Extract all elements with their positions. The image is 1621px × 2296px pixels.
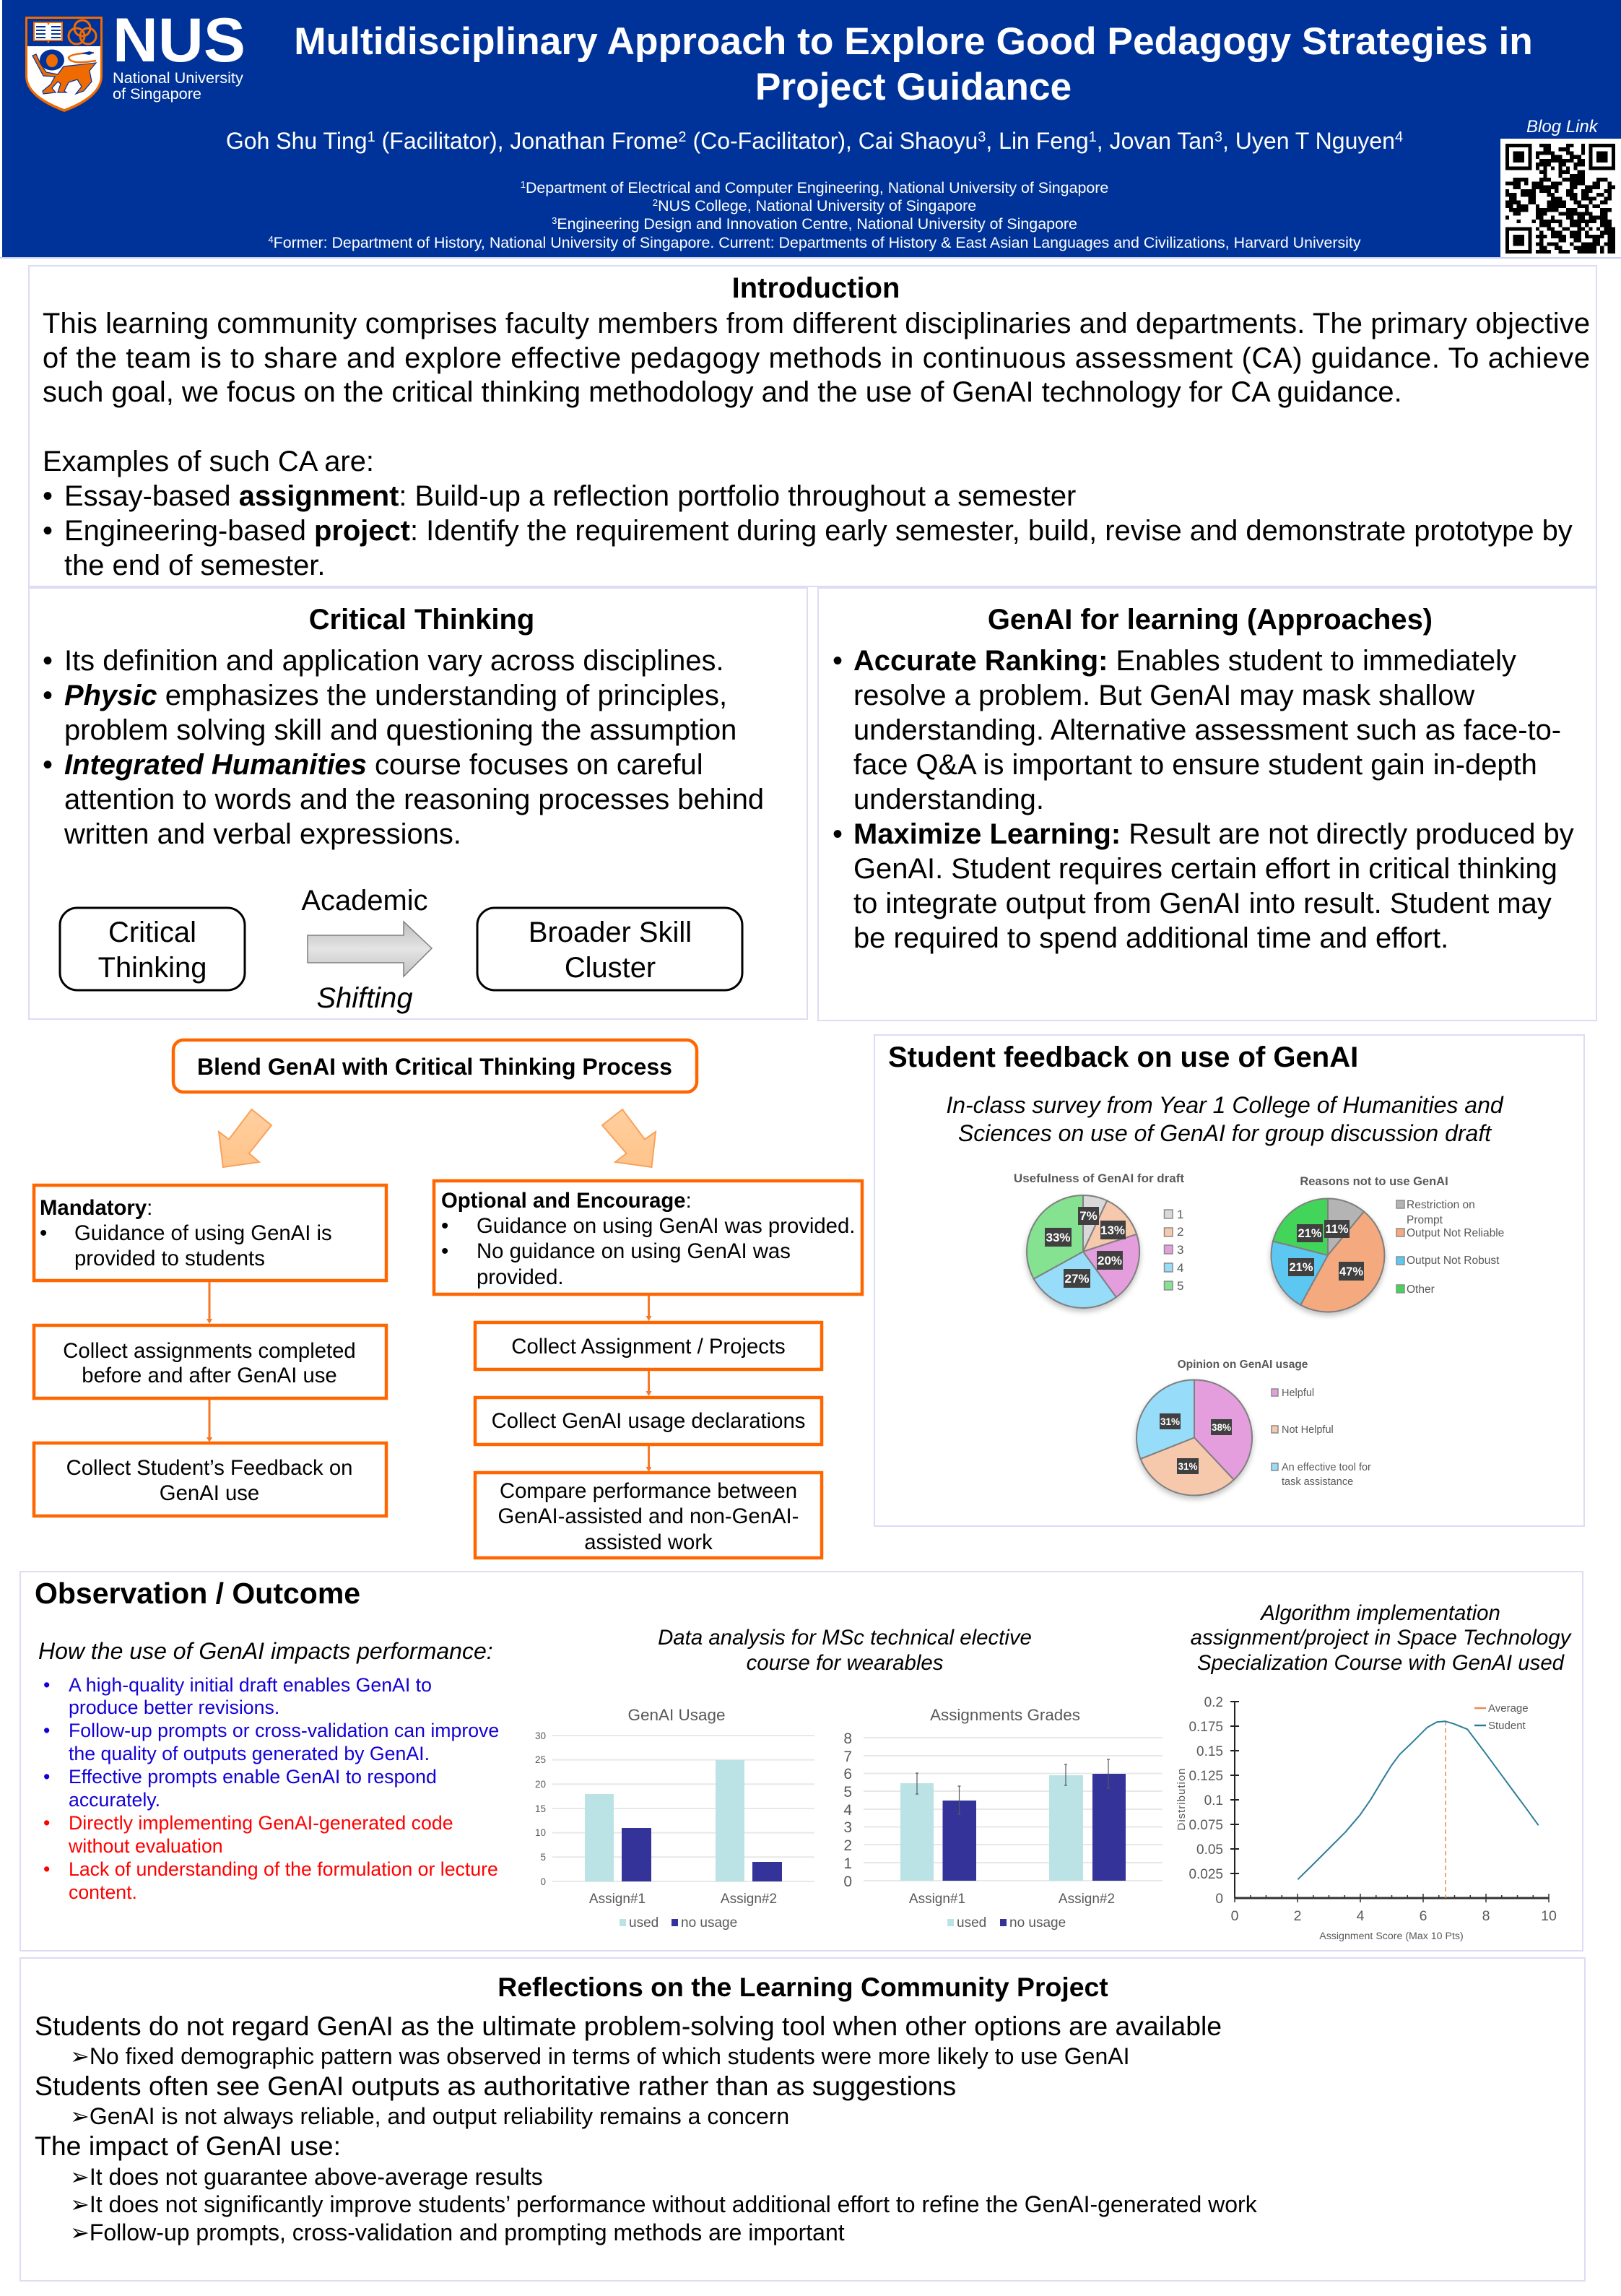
pie chart: usefulness: 20% bbox=[1098, 1254, 1122, 1268]
impacts list: A high-quality initial draft enables GenAI to bbox=[69, 1674, 432, 1696]
panel: critical thinking bbox=[29, 588, 807, 1019]
impacts list: the quality of outputs generated by GenAI. bbox=[69, 1743, 430, 1764]
QR code bbox=[1500, 139, 1621, 257]
approaches bullets: Accurate Ranking: Enables student to immediately bbox=[853, 645, 1516, 677]
logo: NUS shield and wordmark: of Singapore bbox=[113, 85, 201, 103]
pie chart: reasons not to use: Restriction on bbox=[1407, 1199, 1475, 1211]
critical thinking bullets: attention to words and the reasoning processes behind bbox=[64, 784, 764, 815]
algorithm heading: Specialization Course with GenAI used bbox=[1197, 1651, 1565, 1675]
box: collect assignment projects: Collect Assignment / Projects bbox=[511, 1335, 786, 1359]
survey subtitle bbox=[946, 1092, 1504, 1146]
pie chart: opinion: 31% bbox=[1160, 1416, 1180, 1427]
examples list: Examples of such CA are: bbox=[43, 446, 374, 477]
box: mandatory: provided to students bbox=[74, 1247, 265, 1270]
impacts list bbox=[43, 1674, 499, 1903]
box: mandatory: Mandatory: bbox=[40, 1196, 152, 1220]
affiliations: 4 bbox=[268, 234, 274, 245]
data analysis heading: Data analysis for MSc technical elective bbox=[658, 1626, 1032, 1650]
approaches bullets: • bbox=[833, 818, 843, 850]
affiliations: 3 bbox=[552, 215, 557, 226]
authors: 2 bbox=[678, 129, 687, 145]
pie chart: opinion: task assistance bbox=[1282, 1476, 1353, 1488]
line chart: score distribution: Student bbox=[1488, 1720, 1526, 1732]
bar chart: assignments grades: 8 bbox=[843, 1730, 852, 1747]
reflections list: ➢No fixed demographic pattern was observed in terms of which students were more likely to use GenAI bbox=[70, 2042, 1129, 2070]
line chart: score distribution: 10 bbox=[1541, 1908, 1557, 1924]
line chart: score distribution: Assignment Score (Max 10 Pts) bbox=[1319, 1931, 1464, 1942]
panel: reflections bbox=[20, 1958, 1585, 2281]
authors: (Facilitator), Jonathan Frome bbox=[375, 128, 678, 154]
authors: 1 bbox=[368, 129, 375, 145]
algorithm heading bbox=[1191, 1601, 1573, 1675]
pie chart: usefulness bbox=[1014, 1171, 1184, 1308]
affiliations: 2 bbox=[653, 197, 658, 208]
bar chart: GenAI usage: 30 bbox=[535, 1730, 546, 1741]
critical thinking bullets: Integrated Humanities course focuses on careful bbox=[64, 749, 703, 781]
impacts list: • bbox=[43, 1766, 50, 1788]
bar chart: assignments grades: used bbox=[957, 1915, 986, 1931]
line chart: score distribution: 4 bbox=[1357, 1908, 1365, 1924]
bar chart: GenAI usage: no usage bbox=[681, 1915, 737, 1931]
approaches bullets: • bbox=[833, 645, 843, 677]
reflections list: ➢It does not guarantee above-average results bbox=[70, 2163, 543, 2191]
line chart: score distribution: 6 bbox=[1420, 1908, 1427, 1924]
box: collect feedback: GenAI use bbox=[160, 1481, 259, 1505]
survey subtitle: In-class survey from Year 1 College of Humanities and bbox=[946, 1092, 1504, 1118]
logo: NUS shield and wordmark: National University bbox=[113, 69, 243, 87]
bar chart: assignments grades: 0 bbox=[843, 1873, 852, 1890]
impacts list: Follow-up prompts or cross-validation can improve bbox=[69, 1720, 499, 1741]
line chart: score distribution: 0.125 bbox=[1188, 1769, 1223, 1784]
reflections list: ➢It does not significantly improve students’ performance without additional effort to refine the GenAI-generated work bbox=[70, 2191, 1258, 2218]
reflections list: The impact of GenAI use: bbox=[35, 2131, 341, 2161]
box: critical thinking: Thinking bbox=[98, 952, 207, 984]
bar chart: assignments grades bbox=[843, 1706, 1162, 1931]
critical thinking bullets: • bbox=[43, 749, 53, 781]
bar chart: assignments grades: 4 bbox=[843, 1802, 852, 1819]
arrow: to mandatory bbox=[219, 1109, 271, 1167]
affiliations: Engineering Design and Innovation Centre, National University of Singapore bbox=[557, 215, 1077, 233]
panel: student feedback bbox=[874, 1035, 1584, 1526]
bar chart: GenAI usage: 5 bbox=[540, 1852, 546, 1863]
approaches bullets: be required to spend additional time and effort. bbox=[853, 922, 1448, 954]
approaches bullets: to integrate output from GenAI into result. Student may bbox=[853, 888, 1552, 919]
authors: (Co-Facilitator), Cai Shaoyu bbox=[687, 128, 978, 154]
authors: , Lin Feng bbox=[986, 128, 1089, 154]
pie chart: opinion: An effective tool for bbox=[1282, 1462, 1371, 1473]
reflections list: Students often see GenAI outputs as authoritative rather than as suggestions bbox=[35, 2071, 956, 2101]
box: compare performance: GenAI-assisted and non-GenAI- bbox=[498, 1504, 799, 1528]
line chart: score distribution: 2 bbox=[1294, 1908, 1301, 1924]
approaches bullets: GenAI. Student requires certain effort in critical thinking bbox=[853, 853, 1557, 885]
pie chart: usefulness: 4 bbox=[1177, 1261, 1183, 1275]
impacts list: Effective prompts enable GenAI to respond bbox=[69, 1766, 437, 1788]
flow title box bbox=[173, 1040, 697, 1092]
bar chart: GenAI usage: 10 bbox=[535, 1827, 546, 1838]
pie chart: usefulness: 5 bbox=[1177, 1279, 1183, 1293]
pie chart: reasons not to use: Output Not Robust bbox=[1407, 1255, 1500, 1267]
affiliations: Former: Department of History, National University of Singapore. Current: Departments of History & East Asian Languages and Civilizations, Harvard University bbox=[274, 234, 1361, 251]
box: collect assignments: Collect assignments completed bbox=[63, 1339, 356, 1363]
bar chart: assignments grades: 5 bbox=[843, 1784, 852, 1801]
line chart: score distribution: 0.15 bbox=[1196, 1744, 1223, 1759]
bar chart: assignments grades: Assign#2 bbox=[1059, 1892, 1115, 1907]
box: optional and encourage: • bbox=[441, 1214, 448, 1238]
panel: introduction bbox=[29, 266, 1596, 586]
pie chart: opinion: Helpful bbox=[1282, 1387, 1314, 1399]
header banner bbox=[0, 0, 1621, 259]
bar chart: assignments grades: 3 bbox=[843, 1819, 852, 1836]
panel: GenAI for learning bbox=[818, 588, 1596, 1021]
box: compare performance: Compare performance between bbox=[500, 1479, 797, 1503]
authors: 3 bbox=[1214, 129, 1222, 145]
authors: 4 bbox=[1395, 129, 1403, 145]
pie chart: usefulness: 1 bbox=[1177, 1208, 1183, 1221]
critical thinking bullets: problem solving skill and questioning the assumption bbox=[64, 714, 736, 746]
pie chart: opinion: Not Helpful bbox=[1282, 1424, 1334, 1436]
reflections list: ➢Follow-up prompts, cross-validation and prompting methods are important bbox=[70, 2219, 845, 2246]
pie chart: usefulness: 2 bbox=[1177, 1225, 1183, 1239]
line chart: score distribution bbox=[1175, 1695, 1557, 1942]
critical thinking bullets bbox=[43, 645, 764, 850]
bar chart: GenAI usage: Assign#1 bbox=[589, 1892, 646, 1907]
impacts list: Lack of understanding of the formulation or lecture bbox=[69, 1858, 498, 1880]
authors: 1 bbox=[1089, 129, 1097, 145]
intro paragraph bbox=[43, 308, 1590, 408]
data analysis heading: course for wearables bbox=[747, 1651, 944, 1675]
bar chart: assignments grades: 6 bbox=[843, 1766, 852, 1782]
bar chart: GenAI usage: 0 bbox=[540, 1876, 546, 1887]
authors: , Uyen T Nguyen bbox=[1222, 128, 1395, 154]
examples list: the end of semester. bbox=[64, 550, 325, 581]
bar chart: GenAI usage: 20 bbox=[535, 1779, 546, 1790]
line chart: score distribution: 0.05 bbox=[1196, 1842, 1223, 1858]
authors: , Jovan Tan bbox=[1097, 128, 1214, 154]
heading: reflections: Reflections on the Learning Community Project bbox=[497, 1972, 1108, 2002]
pie chart: usefulness: 33% bbox=[1046, 1231, 1071, 1244]
critical thinking bullets: • bbox=[43, 645, 53, 677]
box: collect assignment projects bbox=[475, 1322, 822, 1369]
bar chart: GenAI usage: Assign#2 bbox=[721, 1892, 777, 1907]
box: critical thinking bbox=[60, 908, 245, 990]
pie chart: reasons not to use: Prompt bbox=[1407, 1214, 1443, 1226]
heading: introduction: Introduction bbox=[732, 272, 900, 304]
panel: observation / outcome bbox=[20, 1572, 1583, 1951]
box: collect feedback: Collect Student’s Feedback on bbox=[66, 1456, 352, 1480]
impacts list: accurately. bbox=[69, 1789, 160, 1811]
pie chart: reasons not to use bbox=[1272, 1175, 1504, 1312]
bar chart: assignments grades: no usage bbox=[1009, 1915, 1066, 1931]
bar chart: assignments grades: 7 bbox=[843, 1749, 852, 1765]
pie chart: reasons not to use: 47% bbox=[1339, 1265, 1363, 1278]
pie chart: usefulness: 13% bbox=[1100, 1223, 1125, 1237]
box: compare performance: assisted work bbox=[584, 1530, 713, 1554]
examples list: • bbox=[43, 515, 53, 547]
line chart: score distribution: 0.1 bbox=[1204, 1793, 1223, 1808]
box: broader skill cluster bbox=[477, 908, 742, 990]
box: collect assignments bbox=[34, 1325, 386, 1398]
heading: student feedback: Student feedback on use of GenAI bbox=[888, 1041, 1358, 1073]
examples list: Engineering-based project: Identify the requirement during early semester, build, revise and demonstrate prototype by bbox=[64, 515, 1573, 547]
box: optional and encourage: provided. bbox=[477, 1265, 564, 1289]
box: mandatory bbox=[34, 1185, 386, 1281]
title: Multidisciplinary Approach to Explore Good Pedagogy Strategies in bbox=[294, 20, 1533, 63]
line chart: score distribution: 0 bbox=[1215, 1892, 1223, 1907]
title bbox=[294, 20, 1533, 108]
examples list: Essay-based assignment: Build-up a reflection portfolio throughout a semester bbox=[64, 480, 1076, 512]
affiliations: NUS College, National University of Singapore bbox=[658, 197, 976, 215]
pie chart: reasons not to use: Reasons not to use GenAI bbox=[1300, 1175, 1448, 1188]
pie chart: reasons not to use: 21% bbox=[1289, 1261, 1313, 1274]
line chart: score distribution: Distribution bbox=[1175, 1767, 1188, 1831]
pie chart: usefulness: 7% bbox=[1079, 1209, 1098, 1223]
bar chart: GenAI usage: 25 bbox=[535, 1754, 546, 1765]
intro paragraph: of the team is to share and explore effective pedagogy methods in continuous assessment (CA) guidance. To achieve bbox=[43, 342, 1590, 374]
box: optional and encourage bbox=[434, 1181, 862, 1294]
examples list bbox=[43, 446, 1573, 581]
box: collect feedback bbox=[34, 1443, 386, 1516]
pie chart: opinion: 31% bbox=[1178, 1461, 1198, 1472]
critical thinking bullets: Physic emphasizes the understanding of principles, bbox=[64, 680, 727, 711]
impacts list: • bbox=[43, 1720, 50, 1741]
arrow: academic shifting: Shifting bbox=[316, 982, 413, 1014]
impacts list: produce better revisions. bbox=[69, 1697, 279, 1718]
line chart: score distribution: 0.175 bbox=[1188, 1720, 1223, 1735]
survey subtitle: Sciences on use of GenAI for group discussion draft bbox=[958, 1120, 1492, 1146]
impacts list: • bbox=[43, 1858, 50, 1880]
pie chart: opinion: 38% bbox=[1212, 1422, 1231, 1433]
flow title box: Blend GenAI with Critical Thinking Process bbox=[197, 1054, 672, 1080]
affiliations: Department of Electrical and Computer Engineering, National University of Singapore bbox=[526, 179, 1108, 196]
flowchart: blend GenAI with critical thinking bbox=[34, 1040, 862, 1558]
approaches bullets: Maximize Learning: Result are not directly produced by bbox=[853, 818, 1574, 850]
pie chart: reasons not to use: Output Not Reliable bbox=[1407, 1227, 1504, 1239]
left connectors bbox=[207, 1281, 212, 1442]
box: broader skill cluster: Cluster bbox=[565, 952, 656, 984]
box: optional and encourage: Optional and Encourage: bbox=[441, 1189, 692, 1213]
impacts subheading: How the use of GenAI impacts performance: bbox=[38, 1638, 493, 1664]
arrow: academic shifting: Academic bbox=[301, 885, 428, 917]
line chart: score distribution: 0 bbox=[1231, 1908, 1239, 1924]
bar chart: assignments grades: Assign#1 bbox=[909, 1892, 965, 1907]
bar chart: GenAI usage: 15 bbox=[535, 1803, 546, 1814]
impacts list: without evaluation bbox=[68, 1835, 223, 1857]
line chart: score distribution: 0.075 bbox=[1188, 1818, 1223, 1833]
arrow: to optional bbox=[602, 1109, 656, 1167]
bar chart: assignments grades: Assignments Grades bbox=[930, 1706, 1080, 1724]
box: collect assignments: before and after GenAI use bbox=[82, 1364, 337, 1387]
pie chart: opinion bbox=[1137, 1359, 1371, 1496]
line chart: score distribution: 0.025 bbox=[1188, 1867, 1223, 1882]
bar chart: GenAI usage bbox=[535, 1706, 814, 1931]
intro paragraph: such goal, we focus on the critical thinking methodology and the use of GenAI technology for CA guidance. bbox=[43, 376, 1402, 408]
bar chart: GenAI usage: GenAI Usage bbox=[627, 1706, 726, 1724]
box: optional and encourage: • bbox=[441, 1239, 448, 1263]
box: optional and encourage: No guidance on using GenAI was bbox=[477, 1239, 791, 1263]
pie chart: reasons not to use: Other bbox=[1407, 1283, 1435, 1296]
blog link label: Blog Link bbox=[1526, 117, 1599, 137]
impacts list: Directly implementing GenAI-generated code bbox=[69, 1812, 453, 1834]
approaches bullets bbox=[833, 645, 1574, 954]
bar chart: GenAI usage: used bbox=[629, 1915, 659, 1931]
pie chart: usefulness: 3 bbox=[1177, 1243, 1183, 1257]
data analysis heading bbox=[658, 1626, 1032, 1675]
approaches bullets: understanding. Alternative assessment such as face-to- bbox=[853, 714, 1561, 746]
critical thinking bullets: • bbox=[43, 680, 53, 711]
box: usage declarations: Collect GenAI usage declarations bbox=[492, 1409, 805, 1433]
heading: critical thinking: Critical Thinking bbox=[309, 604, 534, 636]
affiliations: 1 bbox=[521, 179, 526, 190]
algorithm heading: Algorithm implementation bbox=[1259, 1601, 1500, 1625]
impacts list: • bbox=[43, 1674, 50, 1696]
right connectors bbox=[646, 1294, 651, 1472]
reflections list bbox=[35, 2011, 1258, 2246]
logo: NUS shield and wordmark bbox=[25, 6, 245, 112]
pie chart: usefulness: Usefulness of GenAI for draft bbox=[1014, 1171, 1184, 1185]
affiliations bbox=[268, 179, 1361, 251]
pie chart: opinion: Opinion on GenAI usage bbox=[1178, 1359, 1308, 1371]
approaches bullets: understanding. bbox=[853, 784, 1044, 815]
algorithm heading: assignment/project in Space Technology bbox=[1191, 1626, 1573, 1650]
impacts list: content. bbox=[69, 1881, 137, 1903]
approaches bullets: resolve a problem. But GenAI may mask shallow bbox=[853, 680, 1474, 711]
line chart: score distribution: 8 bbox=[1482, 1908, 1490, 1924]
box: mandatory: Guidance of using GenAI is bbox=[74, 1221, 332, 1245]
box: compare performance bbox=[475, 1473, 822, 1558]
bar chart: assignments grades: 2 bbox=[843, 1837, 852, 1854]
line chart: score distribution: Average bbox=[1488, 1702, 1529, 1715]
logo: NUS shield and wordmark: NUS bbox=[113, 6, 245, 75]
heading: observation: Observation / Outcome bbox=[35, 1577, 360, 1610]
reflections list: Students do not regard GenAI as the ultimate problem-solving tool when other options are available bbox=[35, 2011, 1222, 2041]
intro paragraph: This learning community comprises faculty members from different disciplinaries and departments. The primary objective bbox=[43, 308, 1590, 339]
box: broader skill cluster: Broader Skill bbox=[529, 917, 692, 948]
authors: 3 bbox=[978, 129, 986, 145]
reflections list: ➢GenAI is not always reliable, and output reliability remains a concern bbox=[70, 2102, 789, 2130]
title: Project Guidance bbox=[755, 66, 1072, 108]
critical thinking bullets: Its definition and application vary across disciplines. bbox=[64, 645, 724, 677]
pie chart: reasons not to use: 21% bbox=[1298, 1227, 1322, 1240]
bar chart: assignments grades: 1 bbox=[843, 1855, 852, 1872]
authors: Goh Shu Ting bbox=[226, 128, 368, 154]
pie chart: usefulness: 27% bbox=[1064, 1272, 1090, 1286]
box: optional and encourage: Guidance on using GenAI was provided. bbox=[477, 1214, 855, 1238]
examples list: • bbox=[43, 480, 53, 512]
arrow: academic shifting bbox=[301, 885, 432, 1014]
critical thinking bullets: written and verbal expressions. bbox=[64, 818, 461, 850]
box: usage declarations bbox=[475, 1398, 822, 1444]
box: critical thinking: Critical bbox=[108, 917, 196, 948]
approaches bullets: face Q&A is important to ensure student gain in-depth bbox=[853, 749, 1537, 781]
heading: GenAI approaches: GenAI for learning (Approaches) bbox=[988, 604, 1433, 636]
pie chart: reasons not to use: 11% bbox=[1325, 1223, 1349, 1236]
impacts list: • bbox=[43, 1812, 50, 1834]
line chart: score distribution: 0.2 bbox=[1204, 1695, 1223, 1710]
box: mandatory: • bbox=[40, 1221, 47, 1245]
